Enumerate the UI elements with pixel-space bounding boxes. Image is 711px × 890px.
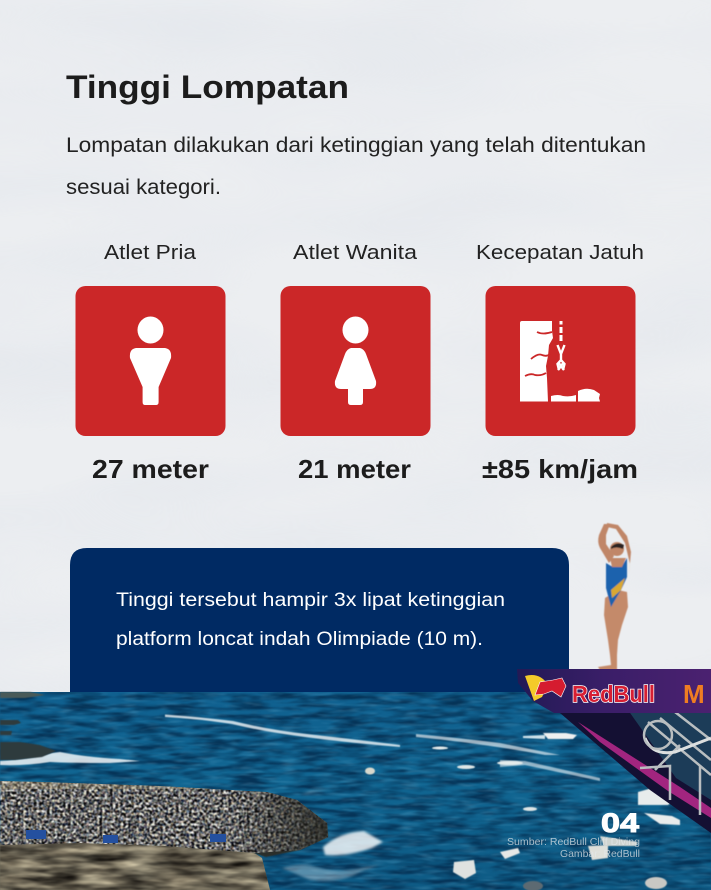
page number: 04	[601, 808, 639, 838]
boats	[365, 733, 680, 890]
source credit: Sumber: RedBull Cliff Diving	[507, 836, 640, 848]
callout box	[70, 548, 569, 692]
intro text	[66, 134, 646, 199]
Red Bull banner	[517, 669, 711, 713]
diver standing on platform	[598, 523, 631, 670]
Red Bull banner: M	[683, 679, 705, 709]
label: Atlet Pria: Atlet Pria	[104, 242, 197, 264]
value: 21 meter: 21 meter	[298, 454, 411, 484]
sea foam and boat wakes	[0, 714, 600, 781]
callout box: Tinggi tersebut hampir 3x lipat ketinggian	[116, 590, 505, 611]
icon: male figure on red card	[76, 286, 226, 436]
column: falling speed	[476, 242, 644, 484]
label: Atlet Wanita: Atlet Wanita	[293, 242, 418, 264]
cliff rock face	[0, 842, 270, 890]
Red Bull banner: RedBull	[572, 681, 655, 707]
dark rock outcrop	[250, 806, 328, 857]
distant rocks on the left	[0, 692, 56, 760]
value: ±85 km/jam: ±85 km/jam	[482, 454, 638, 484]
icon: female figure on red card	[280, 286, 430, 436]
icon: cliff and diver on red card	[486, 286, 636, 436]
intro text: Lompatan dilakukan dari ketinggian yang telah ditentukan	[66, 134, 646, 157]
sea	[0, 692, 711, 890]
label: Kecepatan Jatuh: Kecepatan Jatuh	[476, 242, 644, 264]
title: Tinggi Lompatan	[66, 69, 349, 105]
source credit: Gambar: RedBull	[560, 848, 640, 860]
spectator crowd	[0, 781, 328, 853]
platform underside and truss	[553, 707, 711, 833]
column: female athlete	[280, 242, 430, 484]
source credit	[507, 836, 640, 860]
photo: sea and coast	[0, 692, 711, 890]
background: pale water texture	[0, 0, 711, 692]
intro text: sesuai kategori.	[66, 176, 221, 199]
callout box: platform loncat indah Olimpiade (10 m).	[116, 629, 483, 650]
value: 27 meter: 27 meter	[92, 454, 209, 484]
column: male athlete	[76, 242, 226, 484]
white surf near the cliff	[282, 789, 385, 881]
